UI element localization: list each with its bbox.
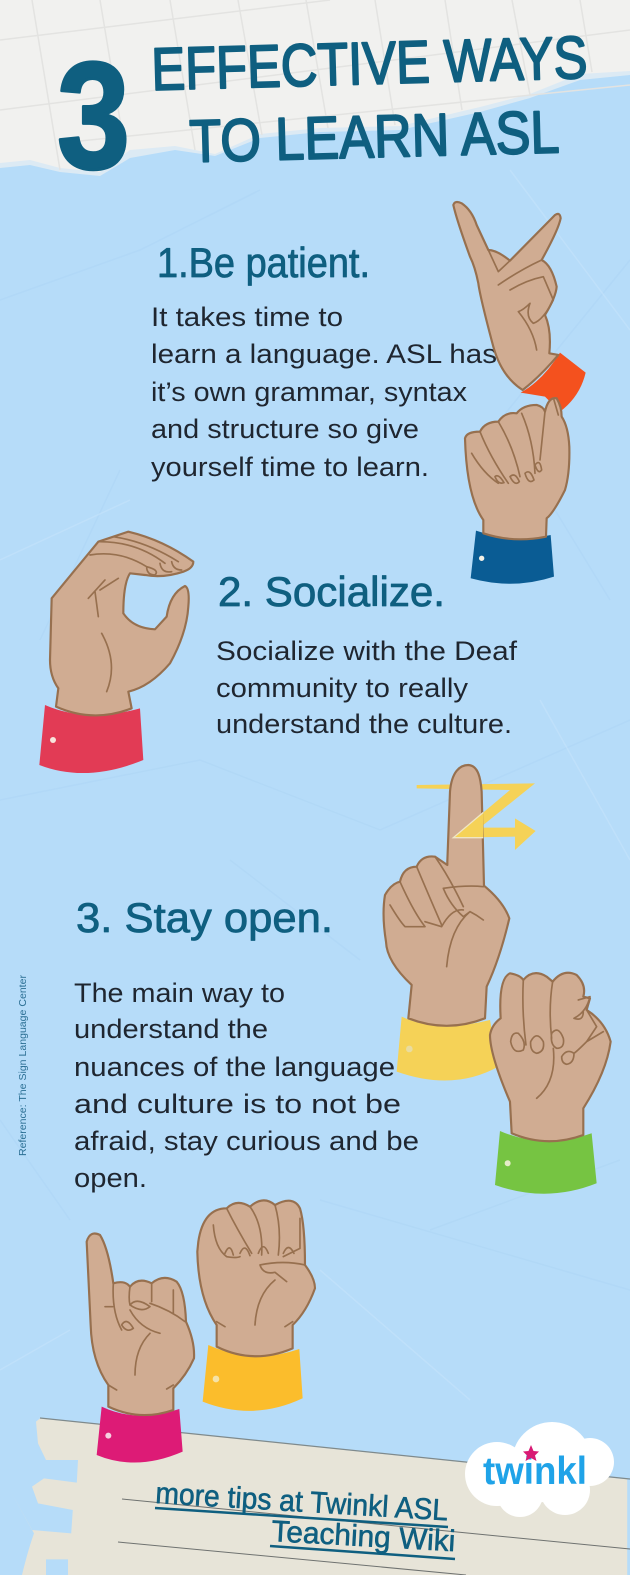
section 3 body text: nuances of the language — [74, 1052, 395, 1082]
section 1 body text: yourself time to learn. — [151, 452, 429, 482]
section 1 body text: It takes time to — [151, 302, 343, 332]
section 2 body text: community to really — [216, 673, 469, 703]
section 1 body text: it’s own grammar, syntax — [151, 377, 468, 407]
icon: closed fist hand with blue cuff — [465, 398, 569, 584]
title line 2: TO LEARN ASL — [189, 98, 560, 175]
footer line 2: Teaching Wiki — [271, 1515, 456, 1558]
logo cloud — [465, 1422, 614, 1517]
icon: fist hand with green cuff — [490, 973, 611, 1194]
twinkl logo — [465, 1422, 614, 1517]
footer line 1: more tips at Twinkl ASL — [155, 1477, 449, 1527]
reference credit, vertical text: Reference: The Sign Language Center — [17, 975, 29, 1156]
section 1 body text — [151, 302, 497, 482]
section 2 body text: understand the culture. — [216, 709, 512, 739]
section 3 body text: open. — [74, 1163, 147, 1193]
icon: pointing pinky hand with magenta cuff — [87, 1233, 194, 1463]
bottom note paper — [10, 1418, 630, 1575]
section 1 body text: learn a language. ASL has — [151, 339, 497, 369]
footer link text — [155, 1477, 456, 1559]
title numeral 3: 3 — [57, 31, 130, 201]
section 3 body text — [74, 978, 419, 1193]
section 2 body text: Socialize with the Deaf — [216, 636, 518, 666]
section 2 heading: 2. Socialize. — [218, 568, 445, 615]
section 1 body text: and structure so give — [151, 414, 419, 444]
top torn grid paper — [0, 0, 630, 176]
footer underlines — [155, 1508, 455, 1559]
section 3 body text: understand the — [74, 1014, 268, 1044]
section 2 body text — [216, 636, 518, 739]
section 3 body text: afraid, stay curious and be — [74, 1126, 419, 1156]
section 1 heading: 1.Be patient. — [157, 239, 370, 286]
section 3 body text: The main way to — [74, 978, 285, 1008]
icon: fist hand with orange cuff — [197, 1200, 315, 1411]
icon: crossed fingers hand with red cuff — [453, 202, 586, 412]
title — [57, 24, 588, 201]
section 3 body text: and culture is to not be — [74, 1089, 401, 1119]
section 3 heading: 3. Stay open. — [76, 894, 333, 941]
logo wordmark: twinkl — [483, 1450, 587, 1493]
logo star — [523, 1445, 539, 1461]
icon: index finger hand drawing Z with yellow cuff — [384, 765, 536, 1081]
icon: C-shape hand with red cuff — [39, 532, 193, 773]
